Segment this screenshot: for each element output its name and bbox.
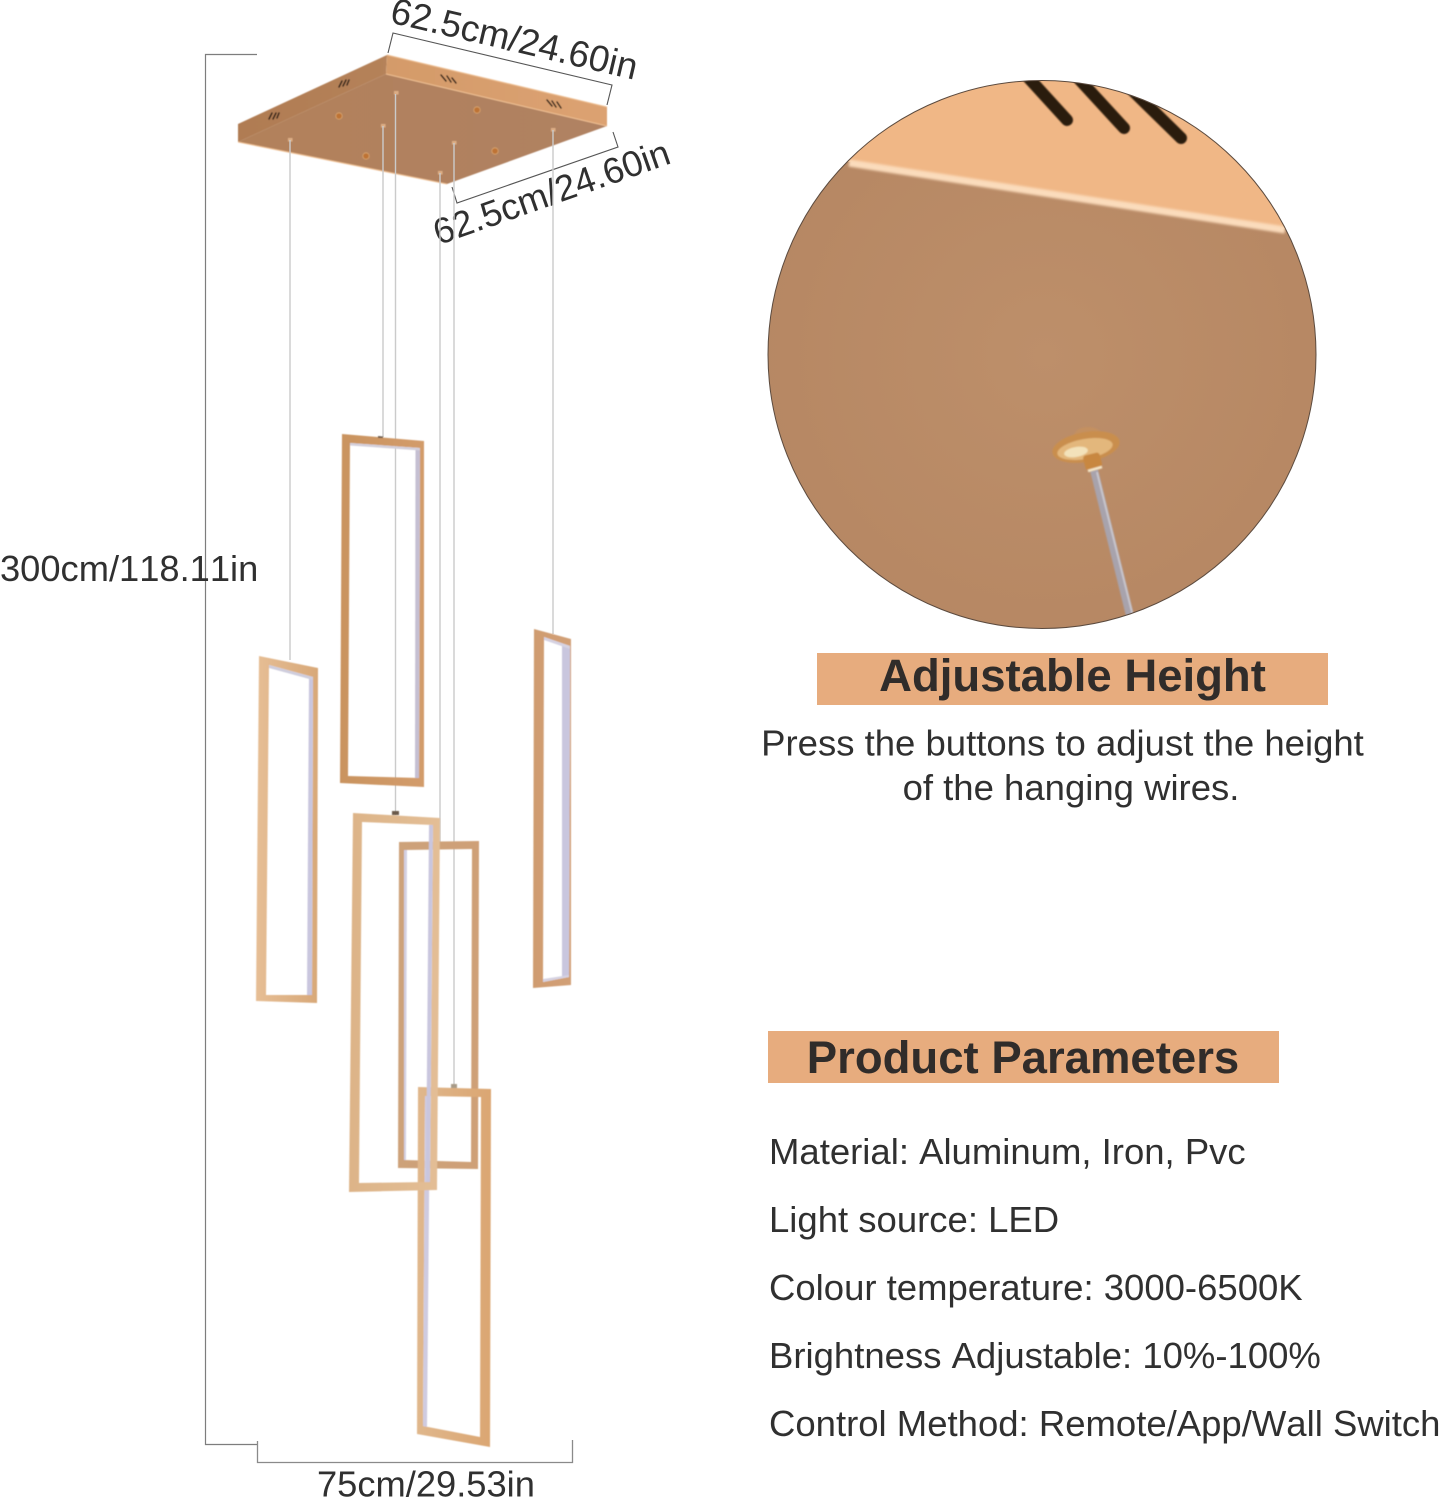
- frame: narrow left: [256, 656, 318, 1003]
- frame: long bottom: [417, 1084, 491, 1447]
- canopy vent slots: [269, 75, 561, 119]
- canopy left edge: [238, 55, 387, 142]
- canopy highlights: [238, 55, 607, 184]
- frame: middle: [398, 841, 479, 1169]
- product parameter list: Light source: LED: [769, 1199, 1059, 1240]
- canopy right edge: [386, 55, 607, 126]
- product parameter list: Control Method: Remote/App/Wall Switch: [769, 1403, 1440, 1444]
- hanging wires: [290, 94, 553, 1088]
- description text: Press the buttons to adjust the height: [761, 722, 1364, 764]
- canopy mounting screws: [336, 107, 498, 159]
- description text: of the hanging wires.: [903, 767, 1239, 808]
- product parameter list: Material: Aluminum, Iron, Pvc: [769, 1131, 1246, 1172]
- frame: large front: [349, 811, 440, 1192]
- product parameter list: [769, 1131, 1440, 1444]
- light frames: [256, 434, 571, 1447]
- heading: Adjustable Height: Adjustable Height: [879, 650, 1266, 701]
- underside surface: [768, 162, 1316, 628]
- canopy edge band: [848, 81, 1285, 229]
- circle outline: [768, 80, 1316, 628]
- description text: [761, 722, 1364, 808]
- ceiling canopy: [238, 55, 607, 184]
- heading: Product Parameters: Product Parameters: [807, 1032, 1239, 1083]
- frame: narrow right: [533, 629, 571, 988]
- width dimension bracket: [258, 1440, 572, 1462]
- mounting knob: [1050, 426, 1122, 471]
- height dimension bracket: [206, 54, 257, 1444]
- hanging wire: [1090, 469, 1134, 615]
- label: overall height: 300cm/118.11in: [0, 548, 258, 589]
- wire caps: [288, 91, 556, 174]
- canopy underside: [238, 74, 607, 184]
- bright edge highlight: [849, 163, 1285, 230]
- canopy top-edge dimension bracket: [388, 33, 612, 105]
- product parameter list: Brightness Adjustable: 10%-100%: [769, 1335, 1321, 1376]
- vent slots: [1025, 74, 1181, 138]
- product parameter list: Colour temperature: 3000-6500K: [769, 1267, 1303, 1308]
- detail circle: wire attachment close-up: [760, 70, 1330, 640]
- canopy side-edge dimension bracket: [452, 132, 618, 203]
- frame: tall centre rear: [340, 434, 424, 787]
- label: canopy side dimension: 62.5cm/24.60in: [427, 132, 675, 253]
